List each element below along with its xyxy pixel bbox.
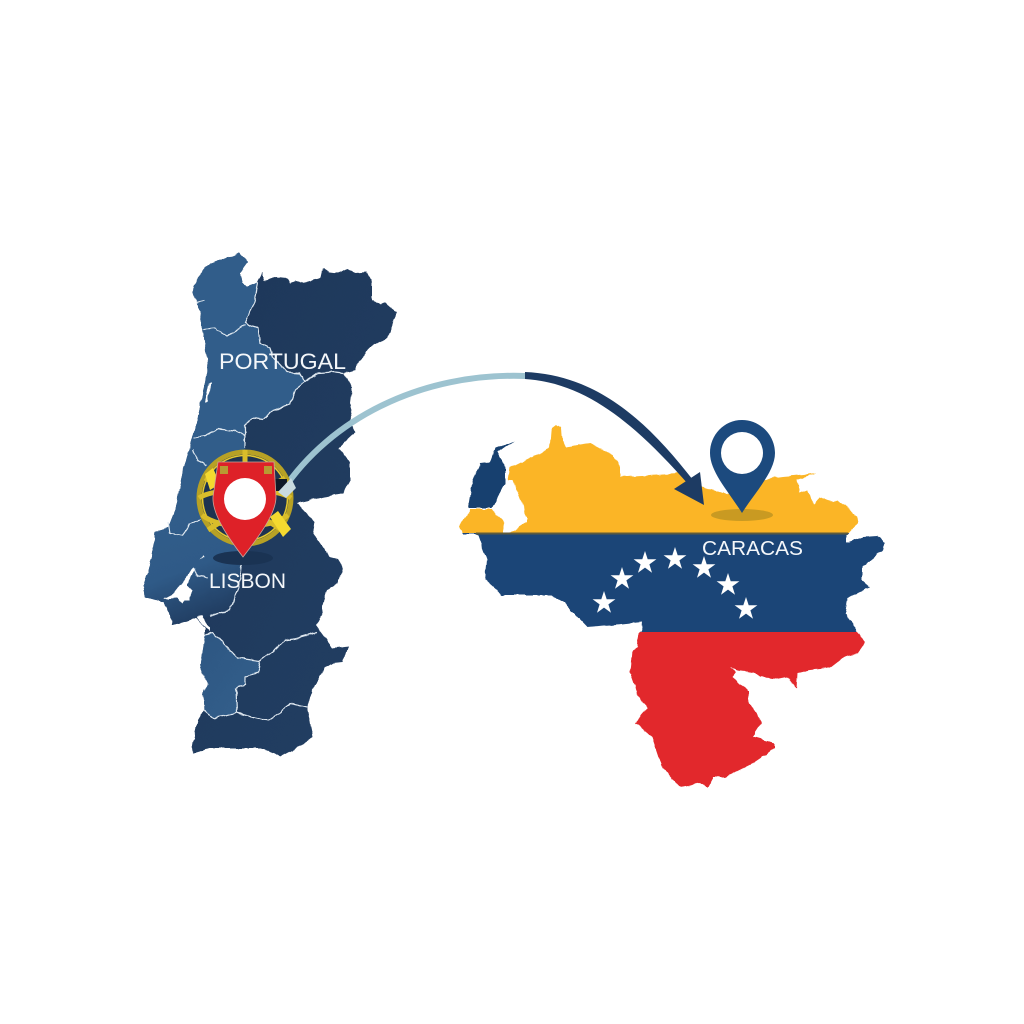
icon: Lisbon red pin	[213, 462, 276, 565]
band divider	[476, 532, 848, 534]
Guajira navy	[468, 441, 515, 508]
route arc: dark segment with arrow	[525, 372, 704, 505]
infographic: Lisbon to Caracas route	[144, 252, 885, 788]
map: Portugal	[143, 253, 397, 757]
label: Caracas: CARACAS	[702, 538, 803, 560]
region borders	[168, 282, 343, 721]
yellow band	[459, 425, 858, 533]
route arc: light segment	[283, 376, 526, 490]
map: Venezuela flag	[450, 415, 895, 797]
red band	[630, 632, 865, 788]
icon: Caracas blue pin	[710, 420, 775, 521]
icon: Portuguese armillary sphere	[199, 450, 296, 544]
Portugal silhouette	[143, 253, 397, 757]
blue band	[450, 533, 895, 632]
stars	[593, 547, 757, 619]
label: Lisbon: LISBON	[209, 569, 286, 593]
Alentejo coast region	[200, 633, 260, 718]
label: Portugal: PORTUGAL	[219, 349, 346, 374]
estuaries	[163, 383, 211, 692]
western regions: north and Lisbon	[143, 253, 305, 625]
